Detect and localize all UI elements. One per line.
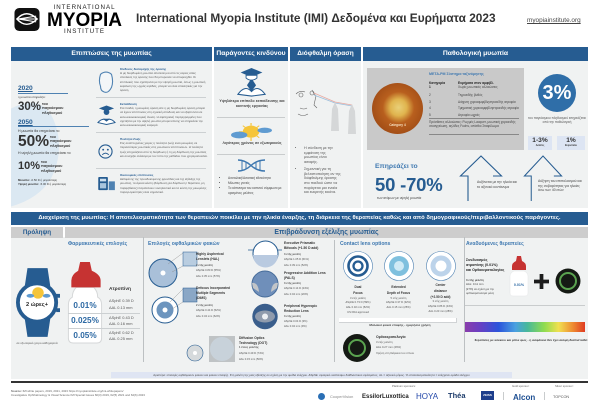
globe watermark [11, 103, 59, 206]
Zeiss: ZEISS [483, 393, 492, 397]
lens: EDOF: ΔAL 0.15 mm (25%) [386, 306, 411, 309]
light therapy note: θεραπείες με κόκκινο και μπλε φως - η ασφάλεια δεν έχει ακόμη διαπιστωθεί [475, 338, 587, 342]
panel: pathologic myopia [363, 47, 588, 208]
lens: DOT: 1 έτους μελέτης [239, 346, 259, 348]
classification table [429, 72, 519, 135]
Thea: Théa [448, 390, 466, 400]
heading: Διόφθαλμη όραση [297, 50, 354, 57]
stat: 50-70% [375, 163, 443, 200]
list: binocular [295, 146, 341, 194]
classification table: Πρόσθετες αλλοιώσεις: Ρωγμές Lacquer, μυωπική χοριοειδής νεοαγγείωση, κηλίδες Fuchs, οπίσθιο Σταφύλωμα [429, 120, 516, 128]
lens: DIMS: (DIMS) [196, 296, 206, 300]
footnote bar: Αριστέρα: επιλογές οφθαλμικών φακών και φακών επαφής· Στη μελέτη της μίας εξέλιξης σε σχέση με την ομάδα ελέγχου. ΔSphE: σφαιρικό ισοδύναμο διαθλαστικού σφάλματος· AL = αξονικό μήκος· % αποτελεσματικότητα = ελέγχεται ομάδα ελέγχου [153, 373, 470, 377]
classification table: Τμηματική χοριοαμφιβληστροειδής ατροφία [458, 106, 519, 110]
source: Investigative Ophthalmology & Visual Science IMI Special Issues 60(3) 2019, 62(5) 2021 and 64(6) 2023 [11, 393, 145, 397]
stat: 2020: του [42, 102, 48, 106]
list: binocular: διόφθαλμης όρασης [304, 176, 337, 180]
item: vision loss: Κίνδυνος διαταραχής της όρασης [120, 67, 166, 71]
lens: orthokeratology: Ορθοκερατολογία [376, 335, 406, 339]
icon: atropine bottle [68, 262, 102, 344]
icon: graduate with book [237, 68, 266, 97]
list: binocular: παράγεται μια ενιαία [304, 186, 337, 190]
stat: 3% globe: 1% [566, 137, 576, 144]
stat: 2050: Η υψηλή μυωπία θα επηρεάσει το [18, 151, 71, 155]
lens: DOT: ΔAL 0.15 mm (50%) [239, 358, 263, 361]
item: vision loss [98, 67, 206, 93]
lens: dual focus: ΔSphE 0.73 D (59%) [346, 301, 370, 304]
lens: PALS: Progressive Addition Lens [284, 271, 326, 275]
source: Source: IMI white papers, 2019, 2021, 2023 https://myopiainstitute.org/imi-whitepapers/ [11, 389, 123, 393]
arrow: increases with prevalence: Αύξηση του επιπολασμού και της σοβαρότητας για ηλικίες άνω των 40 ετών [538, 179, 582, 192]
icon: graduate [97, 106, 116, 125]
Silver sponsor: TOPCON [553, 395, 569, 399]
section: contact lens options: ΔAL 0.23 mm (28%) [428, 310, 453, 313]
lens: dual focus: 3 ετής μελέτη [350, 297, 366, 300]
lens: bifocals: ΔSphE 1.05 D (61%) [284, 258, 309, 261]
lens: DIMS: 2 ετής μελέτη [196, 304, 213, 306]
panel: prevention [11, 227, 63, 345]
icon: sun and clouds [231, 123, 272, 141]
item: education [97, 102, 205, 127]
META-PM classification box [367, 68, 524, 150]
panel background [11, 237, 588, 379]
icon: sad face [98, 144, 113, 159]
atropine doses: 0.01% [73, 301, 97, 310]
section: contact lens options [336, 238, 464, 363]
item: vision loss: Η μη διορθωμένη μυωπία αποτελεί μια από τις κύριες αιτίες απώλειας της όρασης που θα μπορούσε να αποφευχθεί. Οι επιπλοκές που σχετίζονται με την υψηλή μυωπία, όπως η μυωπική εκφύλιση της ωχράς κηλίδας, μπορεί να είναι απειλητικές για την όραση. [120, 71, 205, 92]
lens: PALS: ΔAL 0.04 mm (20%) [284, 292, 308, 296]
icon: bottle 0.01%: 0.01% [514, 283, 524, 287]
logo [14, 4, 122, 35]
panel: binocular vision [290, 47, 361, 208]
lens: DIMS: ΔSphE 0.44 D (52%) [196, 309, 221, 312]
caption: σε εξωτερικό χώρο καθημερινά [16, 341, 58, 345]
lens: PALS: 3 ετής μελέτη [284, 282, 301, 284]
stat: 3% globe: Ευρωπαίοι [565, 145, 577, 147]
lens: PALS: (PALS) [284, 276, 295, 280]
panel background [290, 61, 361, 208]
light spectrum [465, 322, 585, 332]
heading: Πρόληψη [23, 229, 51, 236]
lens: PHRL: Peripheral Hyperopic [284, 304, 317, 308]
lens: DIMS: Multiple Segments [196, 291, 225, 295]
lens: DOT: ΔSphE 0.49 D (74%) [239, 352, 264, 355]
lens: dual focus: ΔAL 0.32 mm (52%) [346, 306, 370, 309]
classification table: Τιγροειδής βυθός [458, 93, 482, 97]
classification table: 5 [429, 112, 431, 116]
item: economic: Οικονομικές επιπτώσεις [120, 173, 153, 177]
lens: HAL [148, 252, 224, 288]
list: genetic: Το κάπνισμα του καπνού σύμφωνα με ορισμένες μελέτες [228, 186, 282, 195]
lens: orthokeratology: 3 ετής μελέτη [376, 340, 393, 344]
list: genetic: Ανατολική/Ασιατική εθνικότητα [228, 176, 271, 180]
lens: dual focus: Focus [353, 291, 363, 295]
heading [11, 47, 212, 61]
divider [11, 381, 588, 382]
therapy description [466, 258, 510, 296]
item: economic: Δεδομένης της προσδοκώμενης φροντίδας και της εξέλιξης της μυωπίας, τα άμεσα κόστη (διόρθωση για διόρθωση / θεραπεία, μη παρεμβάσεις) παρατείνουν νοσηλευτικά και τα κόστη της μειωμένης παραγωγικότητας είναι σημαντικά. [120, 177, 206, 194]
lens: center distance [420, 251, 460, 309]
list: binocular: βελτιστοποίηση αν της [304, 172, 341, 176]
logo text: MYOPIA [47, 10, 122, 30]
list: binocular: Η σύνδεση με την [304, 146, 333, 150]
stat: 3% globe: 1-3% [532, 137, 548, 144]
item: quality of life: Ποιότητα Ζωής [120, 137, 141, 141]
icon: dna [238, 159, 265, 172]
logo text: INTERNATIONAL [53, 4, 116, 11]
CooperVision [318, 393, 325, 400]
stat: 2050: πληθυσμού [50, 144, 70, 148]
list: genetic [219, 176, 282, 195]
footnote bar [111, 372, 512, 378]
watch label: 2 ώρες+ [26, 302, 48, 308]
panel background [11, 61, 212, 208]
lens: HAL: 2 ετής μελέτη [196, 264, 213, 266]
lens: orthokeratology: ΔAL 0.27 mm (46%) [376, 345, 401, 349]
stat: 3% globe: του παγκόσμιου πληθυσμού επηρεάζεται από την παθολογική [528, 116, 586, 124]
list: binocular: εμφάνιση της [304, 151, 326, 155]
lens: center distance: ΔSphE 0.86 D (44%) [428, 305, 453, 308]
lens: orthokeratology: Χρήση στη διάρκεια του ύπνου [376, 351, 414, 355]
icon: brain [98, 72, 114, 93]
stat: 50-70%: 50 -70% [375, 174, 443, 195]
therapy description: ορθοκερατολογία μόνη [466, 291, 494, 295]
item: education: Στα παιδιά, η μειωμένη όραση είτε η μη διορθωμένη όραση μπορεί να έχουν επιπτώσεις στη σχολική απόδοση και να εξαρτώνται σε κοινωνικοοικονομική άνοση. Η αφετηριακή περιγεγραμμένη που σχετίζεται με την υψηλή μυωπία μπορεί επίσης να επηρεάσει την κοινωνικοοικονομική εισφορά. [120, 106, 205, 127]
heading: Φαρμακευτικές επιλογές [68, 241, 127, 247]
therapy description: [27%] σε σχέση με την [466, 287, 494, 291]
sponsors [315, 383, 595, 400]
section: pharmaceutical options: ΔSphE 0.43 D [109, 315, 134, 320]
lens: bifocals: 3 ετής μελέτη [284, 252, 301, 256]
logo text: INSTITUTE [64, 28, 105, 35]
arrow: increases with age: Αυξάνεται με την ηλικία και το αξονικό κοντάνυμα [477, 180, 517, 189]
logo text [47, 4, 122, 35]
section: pharmaceutical options: 0.025% [71, 316, 99, 325]
stat: 3% globe: Ασίατες [536, 145, 544, 147]
lens: PHRL [252, 304, 318, 330]
contact lens note: Μαλακοί φακοί επαφής - ημερήσια χρήση [369, 323, 431, 327]
arrow: increases with age [459, 155, 517, 201]
classification table: Ατροφία ωχράς [458, 112, 480, 116]
stat: 2050: 50% [18, 133, 49, 150]
stat: 2050: Υψηλή μυωπία: -5.00 D ή μεγαλύτερη [18, 182, 66, 186]
stat: 2020 [18, 85, 68, 115]
classification table: META-PM Σύστημα ταξινόμησης [429, 72, 484, 76]
lens: PHRL: Reduction Lens [284, 309, 309, 313]
sponsors: Silver sponsor: [555, 384, 574, 388]
section: pharmaceutical options: ΔSphE 0.39 D [109, 298, 134, 303]
label: education: Υψηλότερο επίπεδο εκπαίδευσης και κοντινής εργασίας [219, 99, 285, 108]
therapy description: ΔAL: 0.11 mm [466, 282, 484, 286]
website: myopiainstitute.org [527, 17, 581, 24]
section: pharmaceutical options [68, 241, 140, 344]
logo icon [14, 8, 40, 31]
lens: PALS: ΔSphE 0.14 D (24%) [284, 287, 309, 290]
lens: PHRL: ΔAL 0.04 mm (9%) [284, 325, 307, 328]
lens: center distance: distance [434, 289, 447, 293]
item: quality of life [98, 137, 208, 159]
stat: 3% globe [528, 74, 586, 150]
classification table: Χωρίς μυωπικές αλλοιώσεις [458, 85, 498, 89]
icon: ortho-k lens [555, 268, 581, 294]
source [11, 390, 145, 397]
banner: myopia management: Διαχείριση της μυωπίας: Η αποτελεσματικότητα των θεραπειών ποικίλει με την ηλικία έναρξης, τη διάρκεια της θεραπείας καθώς και από δημογραφικούς/περιβαλλοντικούς παράγοντες. [38, 215, 561, 221]
atropine results: Ατροπίνη [109, 287, 131, 292]
panel: risk factors [214, 47, 288, 208]
heading [214, 47, 288, 61]
stat: 2050 [18, 119, 89, 186]
section: emerging therapies [465, 238, 588, 363]
classification table: 3 [429, 100, 431, 104]
lens: dual focus [338, 251, 378, 314]
heading [363, 47, 588, 61]
stat: 2020: 30% [18, 101, 41, 113]
panel background [214, 61, 288, 208]
section: pharmaceutical options: ΔAL 0.13 mm [109, 305, 132, 310]
lens: orthokeratology [339, 334, 461, 364]
heading: Επιπτώσεις της μυωπίας [71, 50, 152, 57]
panel: consequences [11, 47, 212, 208]
item: economic [98, 173, 206, 194]
lens: dual focus: Dual [355, 285, 361, 289]
lens: bifocals [248, 240, 318, 268]
list: binocular: μυωπίας είναι [304, 155, 327, 159]
heading: slowing progression: Επιβράδυνση εξέλιξης μυωπίας [274, 229, 379, 236]
panel background [363, 61, 588, 208]
Zeiss [481, 391, 494, 400]
lens: EDOF: ΔSphE 0.37 D (32%) [386, 301, 411, 304]
lens: EDOF [378, 251, 418, 309]
heading: Παράγοντες κινδύνου [216, 50, 286, 57]
lens: PHRL: ΔSphE 0.04 D (3%) [284, 320, 307, 323]
stat: 2020: πληθυσμού [42, 111, 62, 115]
lens: EDOF: 5 ετής μελέτη [391, 297, 406, 300]
lens: DIMS: Defocus Incorporated [196, 286, 230, 290]
list: binocular: και ευκρινής εικόνα. [304, 190, 336, 194]
lens: HAL: Lenslets (HAL) [196, 257, 219, 261]
lens: center distance: (+2.50 D add) [431, 295, 450, 299]
stat: 2050: παγκόσμιου [41, 164, 62, 168]
stat: 50-70%: των ατόμων με υψηλή μυωπία [377, 196, 421, 200]
section: spectacle lens options [148, 240, 326, 362]
heading: Contact lens options [340, 241, 390, 247]
lens: DIMS: ΔAL 0.34 mm (62%) [196, 314, 220, 318]
stat: 2020: 2020 [18, 85, 33, 92]
heading: Επιλογές οφθαλμικών φακών [148, 241, 220, 247]
sponsors: CooperVision [330, 394, 353, 399]
lens: center distance: 3 ετής μελέτη [433, 300, 448, 303]
stat: 2050: του [50, 135, 56, 139]
lens: PHRL: 3 ετής μελέτη [284, 314, 301, 318]
lens: DOT [186, 336, 268, 362]
stat: 2050: πληθυσμού [41, 169, 61, 173]
therapy description: και Ορθοκερατολογίας [466, 268, 504, 272]
section: pharmaceutical options: ΔAL 0.16 mm [109, 321, 132, 326]
classification table: Κατηγορία [429, 81, 445, 85]
fundus photo: Category 4 [389, 123, 406, 127]
stat: 50-70%: Επηρεάζει το [375, 163, 418, 170]
lens: bifocals: Bifocals (+1.50 D add) [284, 246, 318, 250]
heading [290, 47, 361, 61]
sponsor labels: Platinum sponsors: [392, 384, 416, 388]
classification table: 1 [429, 85, 431, 89]
lens: DOT: Technology (DOT) [239, 341, 267, 345]
section: pharmaceutical options: 0.05% [73, 331, 97, 340]
lens: DIMS [152, 286, 230, 324]
icon: watch [16, 268, 60, 337]
list: binocular: στο παιδικό ώστε να [304, 181, 337, 185]
therapy description: Συνδυασμός [466, 258, 487, 262]
lens: HAL: Highly Aspherical [196, 252, 224, 256]
title: International Myopia Institute (IMI) Δεδομένα και Ευρήματα 2023 [136, 11, 496, 25]
heading: slowing progression [65, 227, 588, 238]
label: outdoors: Λιγότερος χρόνος σε εξωτερικούς [222, 141, 282, 145]
sponsors: Gold sponsor: [512, 384, 529, 388]
heading [11, 227, 63, 238]
contact lens note bar [339, 318, 457, 323]
stat: 2050: 2050 [18, 119, 33, 126]
classification table: 2 [429, 93, 431, 97]
arrow: increases with prevalence [523, 155, 582, 201]
lens: bifocals: Executive Prismatic [284, 241, 315, 245]
stat: 2050: Η μυωπία θα επηρεάσει το [18, 129, 60, 133]
stat: 2050: Μυωπία: -0.50 D ή μεγαλύτερη [18, 178, 57, 182]
fundus photo [372, 83, 423, 134]
heading: Αναδυόμενες θεραπείες [466, 241, 524, 247]
banner: myopia management [11, 212, 588, 225]
list: binocular: ασαφής. [304, 160, 318, 164]
stat: 2050: του [41, 160, 47, 164]
therapy description: 3 ετής μελέτη [466, 278, 484, 282]
lens: EDOF: Extended [391, 285, 406, 289]
list: genetic: Μύωπες γονείς [228, 181, 250, 185]
stat: 2050: 10% [18, 160, 40, 172]
icon: globe [538, 74, 576, 112]
list: binocular: Σημαντική για τη [304, 167, 331, 171]
lens: HAL: ΔSphE 0.80 D (55%) [196, 269, 221, 272]
lens: center distance: Center [435, 283, 446, 287]
classification table: 4 [429, 106, 431, 110]
lens: PALS [252, 270, 326, 298]
icon: globe: 3% [543, 82, 571, 104]
stat: 2020: η μυωπία επηρεάζει: [18, 95, 46, 99]
section: pharmaceutical options: ΔSphE 0.62 D [109, 330, 134, 335]
icon: calculator and coins [98, 177, 115, 190]
section: pharmaceutical options: ΔAL 0.25 mm [109, 336, 132, 341]
stat: 2050: παγκόσμιου [50, 139, 71, 143]
lens: EDOF: Depth of Focus [387, 291, 410, 295]
EssilorLuxottica: EssilorLuxottica [362, 394, 409, 400]
lens: DOT: Diffusion Optics [239, 336, 264, 340]
heading: Παθολογική μυωπία [443, 50, 508, 57]
item: education: Εκπαίδευση [120, 102, 137, 106]
item: quality of life: Στις αναπτυγμένες χώρες η ποιότητα ζωής είναι μειωμένη σε περισσότερες μυωπικές στις μυωπικών επιπτώσεων. Η ποιότητα ζωής επηρεάζεται από τη διόρθωση ή τη μη διόρθωση της μυωπίας και συνεχίζει ανάλογα με τον τύπο της μεθόδου που χρησιμοποιείται. [120, 141, 208, 158]
classification table: Διάχυτη χοριοαμφιβληστροειδής ατροφία [458, 100, 516, 104]
icon: bottle 0.01% [510, 256, 530, 296]
lens: dual focus: US FDA approved [347, 311, 369, 314]
lens: HAL: ΔAL 0.35 mm (57%) [196, 274, 220, 278]
therapy description: ατροπίνης (0.01%) [466, 262, 498, 266]
icon: plus [534, 274, 549, 289]
lens: bifocals: ΔAL 0.39 mm (52%) [284, 264, 308, 266]
illustration: binocular vision [296, 90, 356, 134]
classification table: Ευρήματα στον αμφιβλ. [458, 81, 494, 85]
stat: 2020: παγκόσμιου [42, 106, 63, 110]
